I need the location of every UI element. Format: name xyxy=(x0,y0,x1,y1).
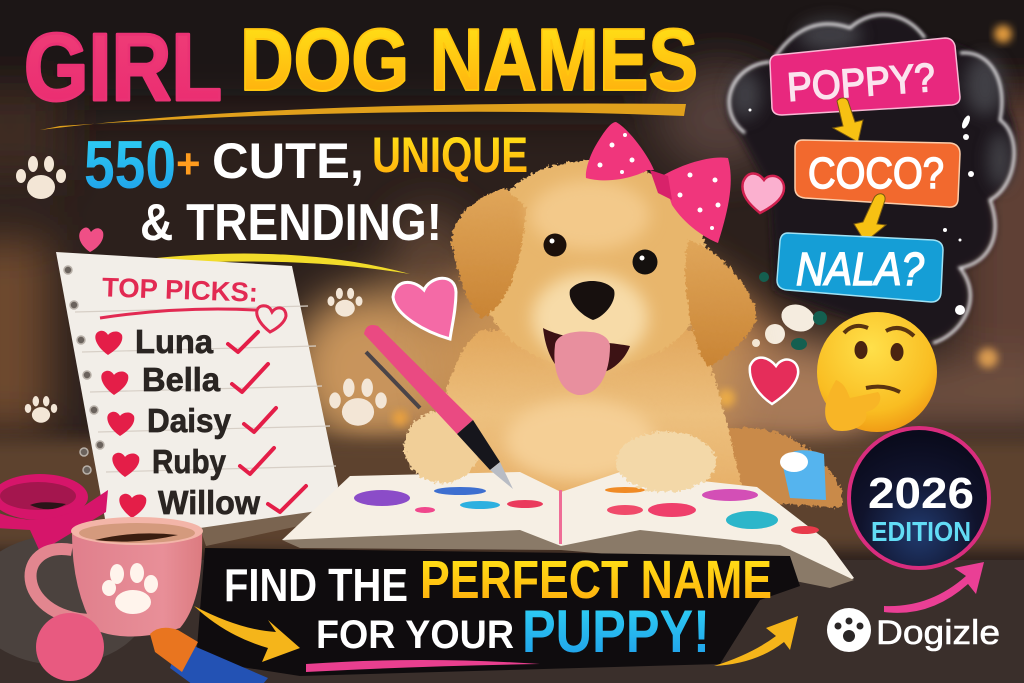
arrow: poppy to coco xyxy=(833,98,863,142)
arrow: coco to nala xyxy=(854,194,886,242)
list: names: Daisy xyxy=(147,402,232,439)
pink yarn ball xyxy=(36,613,104,681)
arrow: right yellow xyxy=(714,616,798,666)
tag: Poppy: POPPY? xyxy=(786,56,937,110)
glow around puppy xyxy=(440,230,740,490)
thought bubbles xyxy=(752,272,827,350)
panel: top picks notepad xyxy=(56,252,338,546)
banner: find the perfect name: FOR YOUR xyxy=(316,613,514,657)
banner: find the perfect name xyxy=(196,548,800,676)
thought cloud xyxy=(728,15,1016,343)
badge: 2026 edition: EDITION xyxy=(871,516,971,547)
bow xyxy=(586,122,731,243)
arrow: left yellow xyxy=(194,606,300,662)
forehead highlight xyxy=(530,180,650,250)
list: names xyxy=(135,323,260,521)
badge: 2026 edition: 2026 xyxy=(868,469,974,518)
badge: 2026 edition xyxy=(849,428,989,613)
spiral binding rings xyxy=(64,266,104,474)
tag: Poppy xyxy=(770,38,960,115)
banner: find the perfect name: FIND THE xyxy=(224,559,408,611)
head xyxy=(478,160,708,368)
subtitle: 550+ cute, unique and trending: 550 xyxy=(84,127,176,203)
title: Girl Dog Names: DOG NAMES xyxy=(240,10,698,109)
list: names: Ruby xyxy=(152,443,227,480)
icon: paw print top left xyxy=(16,156,66,199)
rear body xyxy=(720,428,842,508)
tongue xyxy=(554,332,610,395)
puppy illustration xyxy=(432,122,842,508)
open book xyxy=(282,472,854,588)
body xyxy=(432,330,745,500)
nose xyxy=(570,281,614,320)
title: Girl Dog Names xyxy=(24,10,698,121)
right ear xyxy=(685,240,756,367)
icon: thinking face emoji xyxy=(817,312,937,432)
mouth xyxy=(543,328,630,372)
hearts and check marks xyxy=(95,331,146,518)
notepad page stack xyxy=(200,508,338,546)
subtitle: 550+ cute, unique and trending: CUTE, xyxy=(212,133,364,189)
list: names: Willow xyxy=(158,484,260,521)
subtitle: 550+ cute, unique and trending: + xyxy=(176,140,201,187)
logo: Dogizle xyxy=(827,608,1000,652)
chest highlight xyxy=(505,400,655,480)
list: names: Bella xyxy=(142,361,221,398)
icon: red heart xyxy=(750,358,798,404)
list: names: Luna xyxy=(135,323,214,360)
icon: faint paw prints xyxy=(25,288,387,426)
icon: pink heart by bow xyxy=(742,174,784,213)
subtitle: 550+ cute, unique and trending: & TRENDING! xyxy=(140,194,442,252)
icon: glitter xyxy=(780,450,826,500)
banner: find the perfect name: PERFECT NAME xyxy=(420,550,772,610)
banner: find the perfect name: PUPPY! xyxy=(522,598,710,665)
fur group xyxy=(432,160,756,500)
eyes xyxy=(544,234,566,256)
tag: Coco: COCO? xyxy=(808,149,944,198)
icon: small heart left xyxy=(79,227,103,252)
blue marker xyxy=(150,628,268,683)
coffee mug xyxy=(31,517,203,637)
subtitle underline stroke xyxy=(156,254,410,274)
puppy paws xyxy=(404,411,716,492)
subtitle: 550+ cute, unique and trending xyxy=(84,127,528,252)
tag: Nala xyxy=(777,233,943,302)
title: Girl Dog Names: GIRL xyxy=(24,14,222,121)
tag: Coco xyxy=(795,140,960,207)
title underline stroke xyxy=(40,104,686,130)
banner underline xyxy=(306,660,540,672)
logo: Dogizle: Dogizle xyxy=(876,614,1000,652)
heading: top picks: TOP PICKS: xyxy=(102,272,258,308)
pen xyxy=(364,325,513,489)
subtitle: 550+ cute, unique and trending: UNIQUE xyxy=(372,127,528,183)
left ear xyxy=(452,188,526,318)
muzzle xyxy=(532,273,648,363)
tag: Nala: NALA? xyxy=(796,243,924,295)
icon: pink heart by pen xyxy=(393,278,456,339)
collar xyxy=(0,474,108,552)
